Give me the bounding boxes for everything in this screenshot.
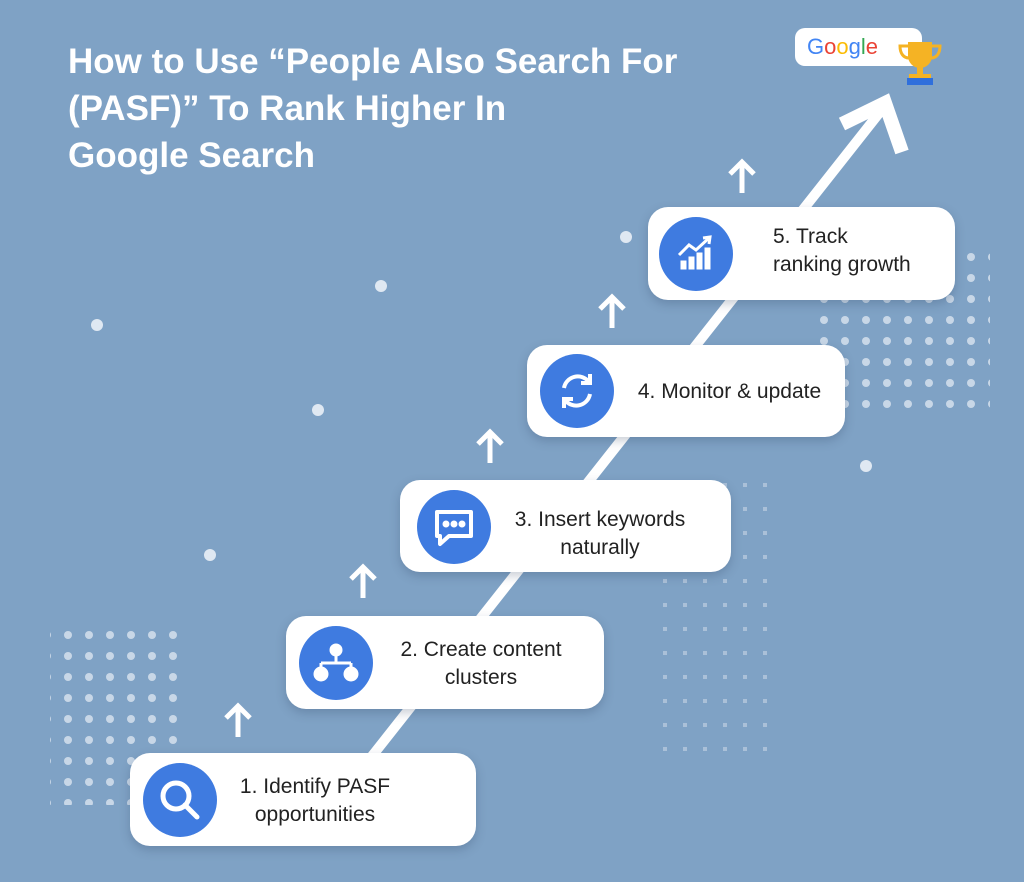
title: Google Search [68,136,315,175]
icon: search [143,763,217,837]
step 4 card [527,345,845,437]
title: How to Use “People Also Search For (PASF)” To Rank Higher In [68,42,677,128]
text: ranking growth [773,253,911,276]
icon: chat [417,490,491,564]
step 5 card [648,207,955,300]
text [773,225,911,276]
text: 2. Create content clusters [400,638,562,689]
icon: trophy [898,42,942,85]
text: 5. Track [773,225,848,248]
title [68,42,677,175]
icon: refresh [540,354,614,428]
step 3 card [400,480,731,572]
step 2 card [286,616,604,709]
google badge [795,28,922,66]
icon: hierarchy [299,626,373,700]
step 1 card [130,753,476,846]
text: 3. Insert keywords naturally [515,508,685,559]
google badge: Google [807,34,878,59]
text: 1. Identify PASF opportunities [240,775,390,826]
text: 4. Monitor & update [638,380,821,403]
icon: growth chart [659,217,733,291]
